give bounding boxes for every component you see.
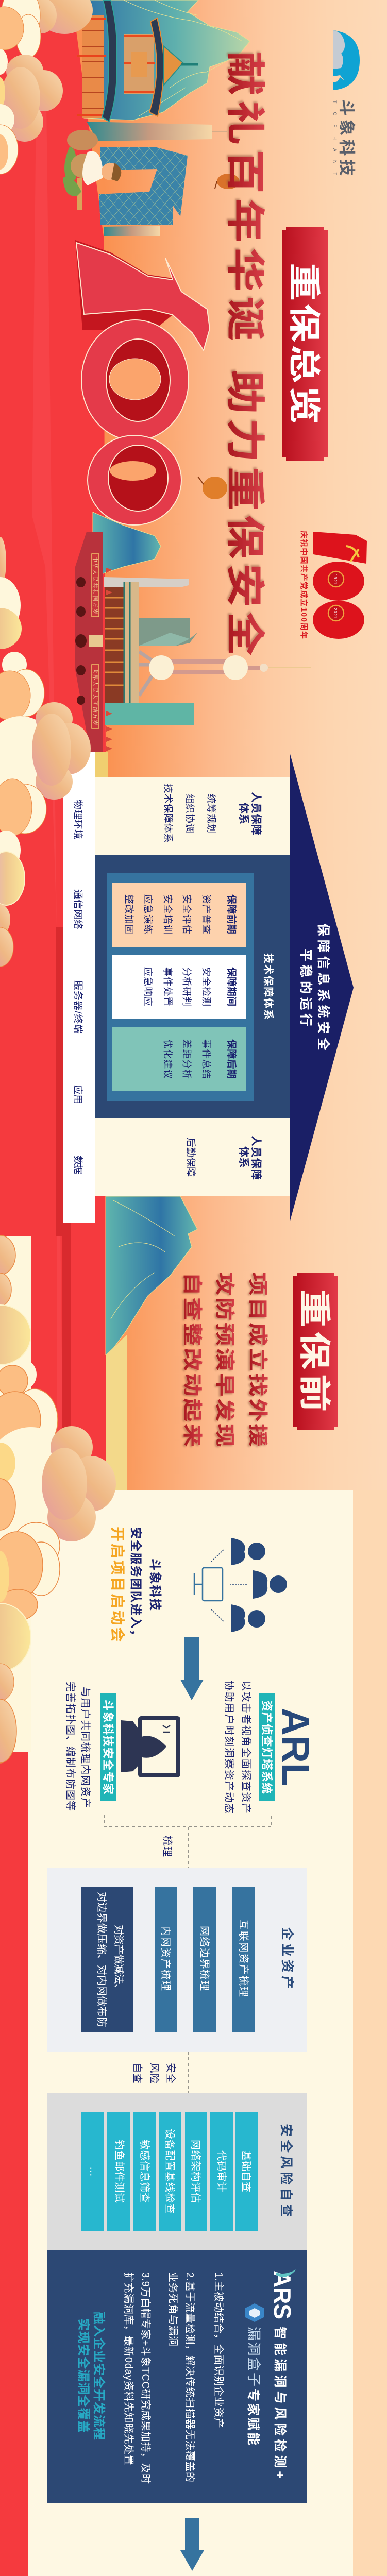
label: 安全风险自查	[131, 2063, 176, 2083]
illustration: guitar player	[63, 130, 121, 210]
illustration: Oriental Pearl tower	[139, 652, 311, 696]
expert label	[100, 1693, 116, 1801]
panel: personnel upper: 统筹规划	[206, 794, 217, 833]
panel: technical support system	[95, 855, 290, 1118]
icon: team of three people with monitor	[194, 1538, 287, 1632]
dark bar: asset reduction: 对资产做减法、	[113, 1925, 125, 1994]
illustration: distant mountain near gate	[93, 512, 161, 573]
title line 1: 献礼百年华诞	[223, 52, 266, 341]
text: team enters: 开启项目启动会	[109, 1527, 126, 1642]
panel: white asset layers strip: 通信网络	[72, 889, 83, 929]
label: 梳理: 梳理	[161, 1836, 173, 1857]
label: 安全风险自查: 自查	[131, 2063, 143, 2083]
panel: personnel lower: 后勤保障	[185, 1138, 196, 1177]
icon: vulnerability box	[245, 2303, 264, 2322]
caption: 庆祝中国共产党成立100周年: 庆祝中国共产党成立100周年	[299, 531, 309, 639]
box: after support: 保障后期	[226, 1039, 238, 1079]
heading lines before-support: 自查整改动起来	[181, 1272, 203, 1447]
title line 2: 助力重保安全	[223, 370, 266, 656]
panel: personnel upper: 体系	[238, 803, 249, 824]
ARS list: 2.基于流量检测，解决传统扫描器无法覆盖的	[184, 2272, 196, 2482]
illustration: Tiananmen gate wall: 中华人民共和国万岁	[92, 556, 99, 614]
badge: 重保前: 重保前	[296, 1289, 332, 1412]
panel: enterprise assets: 企业资产	[280, 1927, 294, 1989]
party 100 logo: 1921	[333, 574, 338, 585]
badge: 重保前	[293, 1273, 338, 1430]
label: 安全风险自查: 风险	[148, 2063, 160, 2083]
panel: personnel upper	[95, 777, 290, 855]
text: team enters	[109, 1527, 162, 1642]
box: before support: 安全培训	[162, 894, 173, 934]
gold ground strip	[106, 1334, 127, 1490]
dark bar: asset reduction: 对边界做压缩、对内网做布防	[96, 1892, 108, 2027]
box: after support: 优化建议	[162, 1039, 173, 1079]
text: team enters: 斗象科技	[148, 1558, 162, 1611]
party 100 logo: 2021	[333, 608, 338, 619]
expert description: 与用户共同梳理内网资产	[79, 1687, 91, 1808]
heading lines before-support	[181, 1272, 268, 1447]
illustration: Tiananmen gate wall	[75, 532, 103, 752]
label: 安全风险自查: 安全	[165, 2063, 176, 2083]
box: after support: 事件总结	[201, 1039, 212, 1079]
panel: enterprise assets	[47, 1868, 307, 2052]
ARS list: 1.主被动结合，全面识别企业资产	[213, 2272, 225, 2428]
icon: expert at computer	[121, 1718, 178, 1775]
box: before support: 安全评估	[181, 894, 192, 934]
bars: asset sorting: 互联网资产梳理	[238, 1920, 249, 1997]
arrow 1	[180, 1637, 204, 1700]
arrow 2	[180, 2518, 204, 2571]
ARL label	[259, 1693, 275, 1801]
panel: security risk self-check	[47, 2093, 307, 2250]
heading lines before-support: 项目成立找外援	[247, 1272, 268, 1447]
panel: personnel lower: 体系	[238, 1146, 249, 1168]
ARL title: ARL	[274, 1708, 317, 1786]
bars: self-check items	[81, 2112, 258, 2231]
ARL description: 以攻击者视角全面探查资产	[240, 1681, 252, 1814]
panel: ARS	[47, 2250, 307, 2503]
expert label: 斗象科技安全专家	[102, 1700, 114, 1794]
panel: white asset layers strip: 应用	[72, 1085, 83, 1104]
cream main panel	[28, 1490, 353, 2576]
bars: self-check items: 网络架构评估	[190, 2140, 201, 2203]
clouds: gate cluster	[0, 537, 91, 967]
bars: asset sorting: 网络边界梳理	[198, 1926, 210, 1991]
party 100 logo	[313, 532, 367, 639]
box: before support: 应急演练	[143, 894, 154, 934]
box: during support: 分析研判	[181, 967, 192, 1006]
bars: self-check items: 代码审计	[215, 2150, 227, 2192]
panel: white asset layers strip: 物理环境	[72, 800, 83, 839]
illustration: Tiananmen gate wall: 世界人民大团结万岁	[92, 668, 99, 725]
panel: white asset layers strip: 数据	[72, 1156, 83, 1174]
box: before support: 保障前期	[226, 894, 238, 934]
illustration: teal mountains behind temple	[84, 0, 250, 120]
box: before support	[112, 883, 246, 947]
badge: 重保总览	[282, 227, 328, 461]
ARL label: 资产侦查灯塔系统	[260, 1700, 273, 1794]
arrow text line 2: 平稳的运行	[298, 948, 313, 1026]
panel: personnel lower: 人员保障	[250, 1136, 262, 1180]
box: before support: 资产普查	[201, 894, 212, 934]
ARL description: 协助用户时刻洞察资产动态	[223, 1681, 235, 1814]
illustration: glass tower near gate	[104, 577, 189, 587]
expert description	[64, 1682, 91, 1811]
box: during support: 安全检测	[201, 967, 212, 1006]
illustration: ancient temple	[77, 0, 198, 122]
bars: self-check items: 设备配置基线检查	[164, 2129, 176, 2214]
box: during support: 保障期间	[226, 967, 238, 1006]
bars: self-check items: 基础自查	[240, 2150, 252, 2192]
ARS title: 智能漏洞与风险检测+	[273, 2327, 287, 2479]
box: during support	[112, 955, 246, 1019]
box: before support: 整改加固	[124, 894, 134, 934]
box: during support: 应急响应	[143, 967, 154, 1006]
bars: self-check items: 敏感信息筛查	[139, 2140, 150, 2203]
gold ground strip top	[95, 752, 108, 777]
ARS list: 扩充漏洞库，最新0day资料先知晓先处置	[123, 2272, 134, 2465]
ARL description	[223, 1681, 252, 1814]
clouds: upper left cluster	[0, 1235, 116, 1763]
illustration: Shanghai towers	[138, 618, 197, 646]
heading lines before-support: 攻防预演早发现	[214, 1272, 235, 1447]
ARS highlight: 实现安全漏洞全覆盖	[76, 2318, 90, 2433]
bars: self-check items: 钓鱼邮件测试	[113, 2140, 125, 2203]
box: after support	[112, 1027, 246, 1091]
panel: security risk self-check: 安全风险自查	[279, 2124, 293, 2217]
box: after support: 差距分析	[181, 1039, 192, 1079]
dashed connector bracket	[105, 1815, 272, 2093]
bars: self-check items: …	[88, 2166, 99, 2177]
panel: personnel upper: 人员保障	[250, 792, 262, 835]
logo mark: Tophant	[333, 30, 360, 90]
ARS highlight: 融入企业安全开发流程	[92, 2312, 106, 2440]
panel: navy goal arrow	[290, 752, 354, 1223]
box text: 专家赋能	[246, 2388, 260, 2445]
clouds: top cluster	[0, 0, 93, 174]
panel: technical support system: 技术保障体系	[262, 953, 274, 1020]
panel: white asset layers strip: 服务器/终端	[72, 980, 83, 1034]
panel: personnel lower	[95, 1118, 290, 1196]
badge: 重保总览: 重保总览	[286, 263, 322, 424]
lanterns	[198, 174, 240, 499]
ARS list	[123, 2272, 225, 2484]
illustration: big numeral 100	[75, 240, 210, 525]
illustration: teal block building	[105, 703, 194, 725]
panel: personnel upper: 技术保障体系	[162, 784, 174, 843]
ARS highlight	[76, 2312, 106, 2440]
bars: asset sorting: 内网资产梳理	[160, 1926, 172, 1991]
illustration: small glass tower	[104, 226, 160, 236]
ARS list: 3.9万白帽专家+斗象TCC研究成果加持，及时	[140, 2272, 152, 2484]
dark bar: asset reduction	[81, 1887, 133, 2032]
flags	[106, 568, 112, 751]
illustration: CCTV tower	[99, 147, 188, 225]
ARS list: 业务死角与漏洞	[167, 2272, 179, 2346]
ARS logo: ARS	[269, 2270, 296, 2319]
right peach strip	[353, 1490, 387, 2576]
expert description: 完善拓扑图、编制布防图等	[64, 1682, 76, 1811]
text: team enters: 安全服务团队进入，	[129, 1527, 143, 1641]
panel: white asset layers strip	[63, 752, 95, 1223]
box text	[246, 2327, 261, 2445]
illustration: gate tower top	[105, 582, 139, 703]
box: during support: 事件处置	[162, 967, 173, 1006]
box text: 漏洞盒子	[246, 2327, 261, 2386]
logo text: 斗象科技: 斗象科技	[338, 99, 356, 176]
panel: personnel upper: 组织协调	[184, 794, 195, 833]
logo text: 斗象科技: TOPHANT	[332, 100, 338, 175]
red curtain	[0, 0, 106, 2576]
illustration: lower mountain	[106, 1196, 197, 1355]
illustration: skyscraper checker tower	[87, 122, 227, 141]
arrow text line 1: 保障信息系统安全	[316, 923, 330, 1050]
bars: asset sorting	[155, 1887, 255, 2032]
